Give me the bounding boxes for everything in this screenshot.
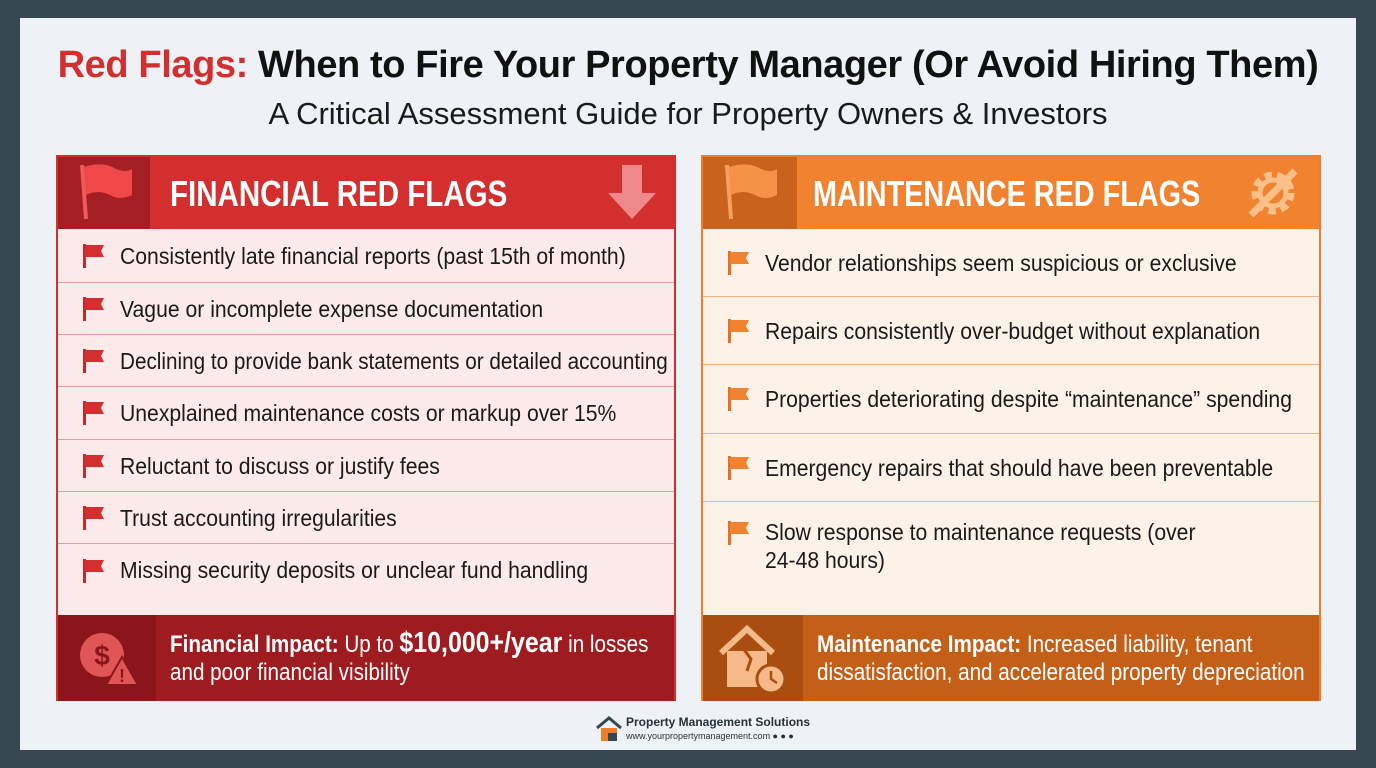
list: financial items: Declining to provide bank statements or detailed accounting bbox=[120, 348, 668, 374]
list: maintenance items: Vendor relationships seem suspicious or exclusive bbox=[765, 250, 1237, 276]
list: maintenance items: Emergency repairs that should have been preventable bbox=[765, 455, 1273, 481]
list: financial items: Reluctant to discuss or justify fees bbox=[120, 453, 440, 479]
list: financial items: Missing security deposits or unclear fund handling bbox=[120, 557, 588, 583]
brand name: Property Management Solutions bbox=[626, 715, 810, 729]
title: Red Flags: When to Fire Your Property Manager (Or Avoid Hiring Them) bbox=[58, 44, 1318, 86]
impact text: Maintenance Impact: Increased liability, tenant bbox=[817, 631, 1253, 658]
icon: dollar warning: ! bbox=[119, 666, 125, 686]
subtitle: A Critical Assessment Guide for Property Owners & Investors bbox=[268, 96, 1108, 131]
icon: dollar warning bbox=[58, 615, 156, 701]
heading: FINANCIAL RED FLAGS bbox=[170, 173, 507, 214]
impact text bbox=[817, 631, 1305, 686]
list: maintenance items: 24-48 hours) bbox=[765, 547, 885, 573]
icon: orange flag bbox=[703, 157, 797, 229]
panel: financial red flags bbox=[56, 155, 676, 701]
callout: financial impact bbox=[58, 615, 674, 701]
list: maintenance items bbox=[703, 250, 1319, 573]
icon: dollar warning: $ bbox=[94, 640, 110, 671]
callout: maintenance impact bbox=[703, 615, 1319, 701]
icon: cracked house clock bbox=[703, 615, 803, 701]
icon: house logo bbox=[596, 716, 622, 741]
list: maintenance items: Repairs consistently over-budget without explanation bbox=[765, 318, 1260, 344]
list: financial items: Vague or incomplete expense documentation bbox=[120, 296, 543, 322]
list: maintenance items: Slow response to maintenance requests (over bbox=[765, 519, 1195, 545]
panel: maintenance red flags bbox=[701, 155, 1321, 701]
heading: MAINTENANCE RED FLAGS bbox=[813, 173, 1200, 214]
list: financial items: Unexplained maintenance costs or markup over 15% bbox=[120, 400, 616, 426]
impact text: dissatisfaction, and accelerated property depreciation bbox=[817, 659, 1305, 686]
header: financial bbox=[58, 157, 674, 229]
icon: red flag bbox=[58, 157, 150, 229]
list: financial items: Trust accounting irregularities bbox=[120, 505, 397, 531]
list: financial items: Consistently late financial reports (past 15th of month) bbox=[120, 243, 626, 269]
impact text: and poor financial visibility bbox=[170, 659, 410, 686]
header: maintenance bbox=[703, 157, 1319, 229]
website: www.yourpropertymanagement.com ● ● ● bbox=[626, 731, 794, 741]
impact text: Financial Impact: Up to $10,000+/year in losses bbox=[170, 627, 648, 659]
list: maintenance items: Properties deteriorating despite “maintenance” spending bbox=[765, 386, 1292, 412]
list: financial items bbox=[58, 243, 674, 583]
impact text bbox=[170, 627, 648, 686]
icon: down arrow bbox=[608, 165, 656, 219]
footer: logo bbox=[596, 715, 810, 741]
icon: wrench gear bbox=[1248, 168, 1298, 218]
